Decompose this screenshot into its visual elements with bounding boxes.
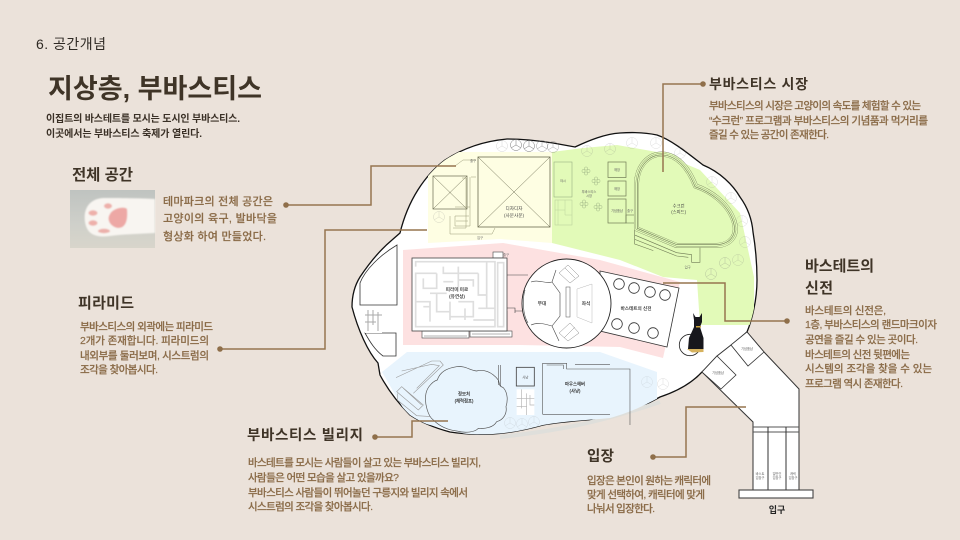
panel: temple of bastet [805,258,937,390]
callout lines [217,81,790,460]
plan outline [352,133,757,434]
heading: temple: 신전 [805,280,833,297]
zone: market [554,138,750,280]
zone: market: 기념품샵 [611,208,623,213]
heading: temple: 바스테트의 [805,258,874,275]
zone: village [396,361,668,432]
zone: pyramid area: (사문사문) [504,212,524,219]
zone: temple: 좌석 [582,300,590,307]
zone: market: 매장 [614,186,620,191]
zone: temple: 무대 [538,300,546,307]
zone: maze: 출구 [503,252,509,257]
text: pyramid: 내외부를 둘러보며, 시스트럼의 [80,349,209,362]
text: temple: 1층, 부바스티스의 랜드마크이자 [805,319,937,331]
zone: market: 야시 [560,178,566,183]
zone: village: (체력점프) [455,397,474,404]
entrance building [702,332,813,515]
panel: market [709,76,928,141]
text: market: “수크런” 프로그램과 부바스티스의 기념품과 먹거리를 [709,114,928,127]
entrance building: 입구 [769,504,785,515]
text: whole space: 테마파크의 전체 공간은 [163,195,273,208]
text: whole space: 형상화 하여 만들었다. [163,229,266,243]
entrance building: 입장구 [773,475,781,480]
heading: village: 부바스티스 빌리지 [247,427,363,444]
heading: entrance: 입장 [587,448,614,465]
zone colours [382,145,754,440]
zone: temple [522,259,679,348]
zone: maze [412,252,528,338]
text: pyramid: 조각을 찾아봅시다. [80,363,158,376]
text: whole space: 고양이의 육구, 발바닥을 [163,212,277,225]
entrance building: 입장구 [789,475,797,480]
text: pyramid: 2개가 존재합니다. 피라미드의 [80,334,209,347]
text: village: 시스트럼의 조각을 찾아봅시다. [248,500,373,513]
intro text: 이곳에서는 부바스티스 축제가 열린다. [46,127,202,140]
left lobe buildings [360,245,397,356]
zone: village: 마우스헤버 [565,381,585,388]
text: temple [805,305,937,390]
text: temple: 프로그램 역시 존재한다. [805,377,903,390]
panel: entrance [587,448,711,515]
zone: maze: 피라미 미로 [446,286,469,293]
zone: pyramid area: 디자디자 [506,205,523,212]
panel: whole space [70,166,277,248]
zone: village: 사냥 [522,374,528,379]
text: pyramid [80,321,213,376]
text: village: 사람들은 어떤 모습을 살고 있을까요? [248,471,399,484]
panel: pyramid [78,295,213,376]
text: temple: 시스템의 조각을 찾을 수 있는 [805,362,932,375]
heading: market: 부바스티스 시장 [709,76,808,92]
heart track: (스피드) [671,209,687,216]
heading: temple [805,258,874,297]
zone: maze: (유연성) [449,293,465,300]
text: entrance: 맞게 선택하여, 캐릭터에 맞게 [587,488,705,501]
heading: whole space: 전체 공간 [72,166,133,184]
text: entrance: 나눠서 입장한다. [587,502,655,515]
intro text: 이집트의 바스테트를 모시는 도시인 부바스티스. [46,112,240,125]
zone: market: 시장 [586,193,592,198]
text: entrance: 입장은 본인이 원하는 캐릭터에 [587,474,711,487]
photo: cat paw [70,190,155,248]
text: temple: 바스테트의 신전 뒷편에는 [805,348,910,361]
zone: temple: 바스테트의 신전 [621,305,651,312]
heart track: 수크런 [673,202,685,209]
entrance building: 캐릭 [790,471,796,476]
title: 지상층, 부바스티스 [48,74,262,104]
section label: 6. 공간개념 [36,36,106,52]
zone: market: 부바스티스 [582,189,596,194]
zone: pyramid area: 입구 [477,235,483,240]
text: whole space [163,195,277,243]
text: entrance [587,474,711,515]
entrance building: 기념품샵 [712,370,724,375]
zone: market: 매장 [614,167,620,172]
heading: pyramid: 피라미드 [78,295,134,312]
text: market: 즐길 수 있는 공간이 존재한다. [709,128,829,141]
entrance building: 입장구 [756,475,764,480]
entrance building: 기념품샵 [741,346,753,351]
intro text [46,112,240,140]
text: temple: 바스테트의 신전은, [805,305,886,317]
zone: village: 정모처 [458,390,470,397]
zone: market: 출구 [627,208,633,213]
text: temple: 공연을 즐길 수 있는 곳이다. [805,333,918,346]
entrance building: 바스트 [756,471,764,476]
entrance building: 일반인 [773,471,781,476]
text: village [248,456,481,513]
text: market [709,99,928,141]
icon: bastet cat statue [679,313,704,356]
zone: village: (사냥) [570,388,581,395]
text: pyramid: 부바스티스의 외곽에는 피라미드 [80,321,213,333]
text: market: 부바스티스의 시장은 고양이의 속도를 체험할 수 있는 [709,99,921,112]
zone: pyramid area [433,140,558,240]
text: village: 부바스티스 사람들이 뛰어놀던 구릉지와 빌리지 속에서 [248,486,468,499]
panel: village [247,427,481,513]
text: village: 바스테트를 모시는 사람들이 살고 있는 부바스티스 빌리지, [248,456,481,469]
heart track [635,155,734,269]
heart track: 입구 [685,264,691,269]
site plan [352,133,813,515]
zone: pyramid area: 출구 [470,158,476,163]
